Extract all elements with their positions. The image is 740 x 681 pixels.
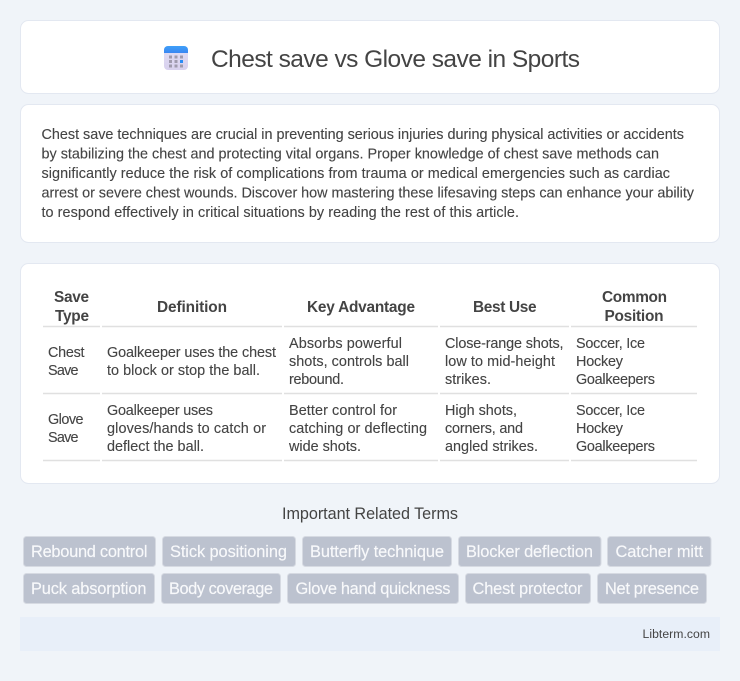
panel: introduction: [20, 104, 720, 242]
table row: chest save: [48, 336, 655, 388]
panel: title card: [20, 20, 720, 94]
table header row: Key Advantage: [307, 299, 415, 316]
table row: glove save: Save: [48, 430, 78, 446]
table row: chest save: Save: [48, 363, 78, 379]
table row: glove save: Goalkeepers: [576, 439, 655, 455]
table row: glove save: deflect the ball.: [107, 439, 204, 455]
text block: introduction paragraph: to respond effectively in critical situations by reading the rest of this article.: [42, 205, 519, 221]
tags: related terms: Rebound control: [31, 543, 148, 561]
table row: chest save: Goalkeeper uses the chest: [107, 345, 276, 361]
tags: related terms: Butterfly technique: [310, 543, 444, 561]
table row: glove save: angled strikes.: [445, 439, 538, 455]
table row: glove save: Hockey: [576, 421, 624, 437]
tags: related terms: Catcher mitt: [616, 543, 703, 561]
panel: comparison table: [20, 264, 720, 484]
title: Chest save vs Glove save in Sports: [211, 46, 580, 73]
table row: glove save: Better control for: [289, 403, 397, 419]
table row: glove save: catching or deflecting: [289, 421, 427, 437]
tags: related terms: Chest protector: [472, 580, 583, 598]
text block: introduction paragraph: by stabilizing the chest and protecting vital organs. Proper knowledge of chest save methods can: [42, 146, 659, 162]
table row: glove save: corners, and: [445, 421, 523, 437]
footer: [20, 617, 720, 651]
tags: related terms: Glove hand quickness: [296, 580, 450, 598]
table row: chest save: Chest: [48, 345, 84, 361]
heading: important related terms: Important Related Terms: [282, 505, 458, 523]
table row: glove save: High shots,: [445, 403, 517, 419]
tags: related terms: Stick positioning: [170, 543, 287, 561]
table row: chest save: rebound.: [289, 372, 344, 388]
table header row: [54, 289, 667, 325]
table header row: Definition: [157, 299, 227, 316]
table row: glove save: Goalkeeper uses: [107, 403, 213, 419]
table row: chest save: to block or stop the ball.: [107, 363, 260, 379]
table row: chest save: Close-range shots,: [445, 336, 564, 352]
table rules: [43, 326, 697, 460]
tags: related terms: Body coverage: [169, 580, 273, 598]
tags: related terms: Puck absorption: [31, 580, 146, 598]
tags: related terms: Net presence: [605, 580, 699, 598]
table header row: Common: [602, 289, 667, 306]
table header row: Type: [55, 308, 89, 325]
table row: chest save: Soccer, Ice: [576, 336, 645, 352]
table row: glove save: Soccer, Ice: [576, 403, 645, 419]
table row: chest save: strikes.: [445, 372, 491, 388]
table row: chest save: Hockey: [576, 354, 624, 370]
table row: chest save: Goalkeepers: [576, 372, 655, 388]
table row: glove save: [48, 403, 655, 455]
table row: chest save: shots, controls ball: [289, 354, 409, 370]
table row: glove save: Glove: [48, 412, 84, 428]
tags: related terms: [24, 536, 711, 604]
table header row: Best Use: [473, 299, 537, 316]
text block: introduction paragraph: Chest save techniques are crucial in preventing serious injuries during physical activities or accidents: [42, 127, 684, 143]
table row: glove save: wide shots.: [288, 439, 361, 455]
table row: chest save: Absorbs powerful: [289, 336, 402, 352]
text block: introduction paragraph: [42, 127, 695, 221]
text block: introduction paragraph: significantly reduce the risk of complications from trauma or medical emergencies such as cardiac: [42, 166, 670, 182]
footer: Libterm.com: [642, 627, 710, 641]
table header row: Position: [604, 308, 664, 325]
table row: glove save: gloves/hands to catch or: [107, 421, 266, 437]
table header row: Save: [54, 289, 89, 306]
icon: calendar: [164, 46, 188, 70]
text block: introduction paragraph: arrest or severe chest wounds. Discover how mastering these lifesaving steps can enhance your ability: [42, 186, 695, 202]
tags: related terms: Blocker deflection: [466, 543, 593, 561]
table row: chest save: low to mid-height: [445, 354, 555, 370]
